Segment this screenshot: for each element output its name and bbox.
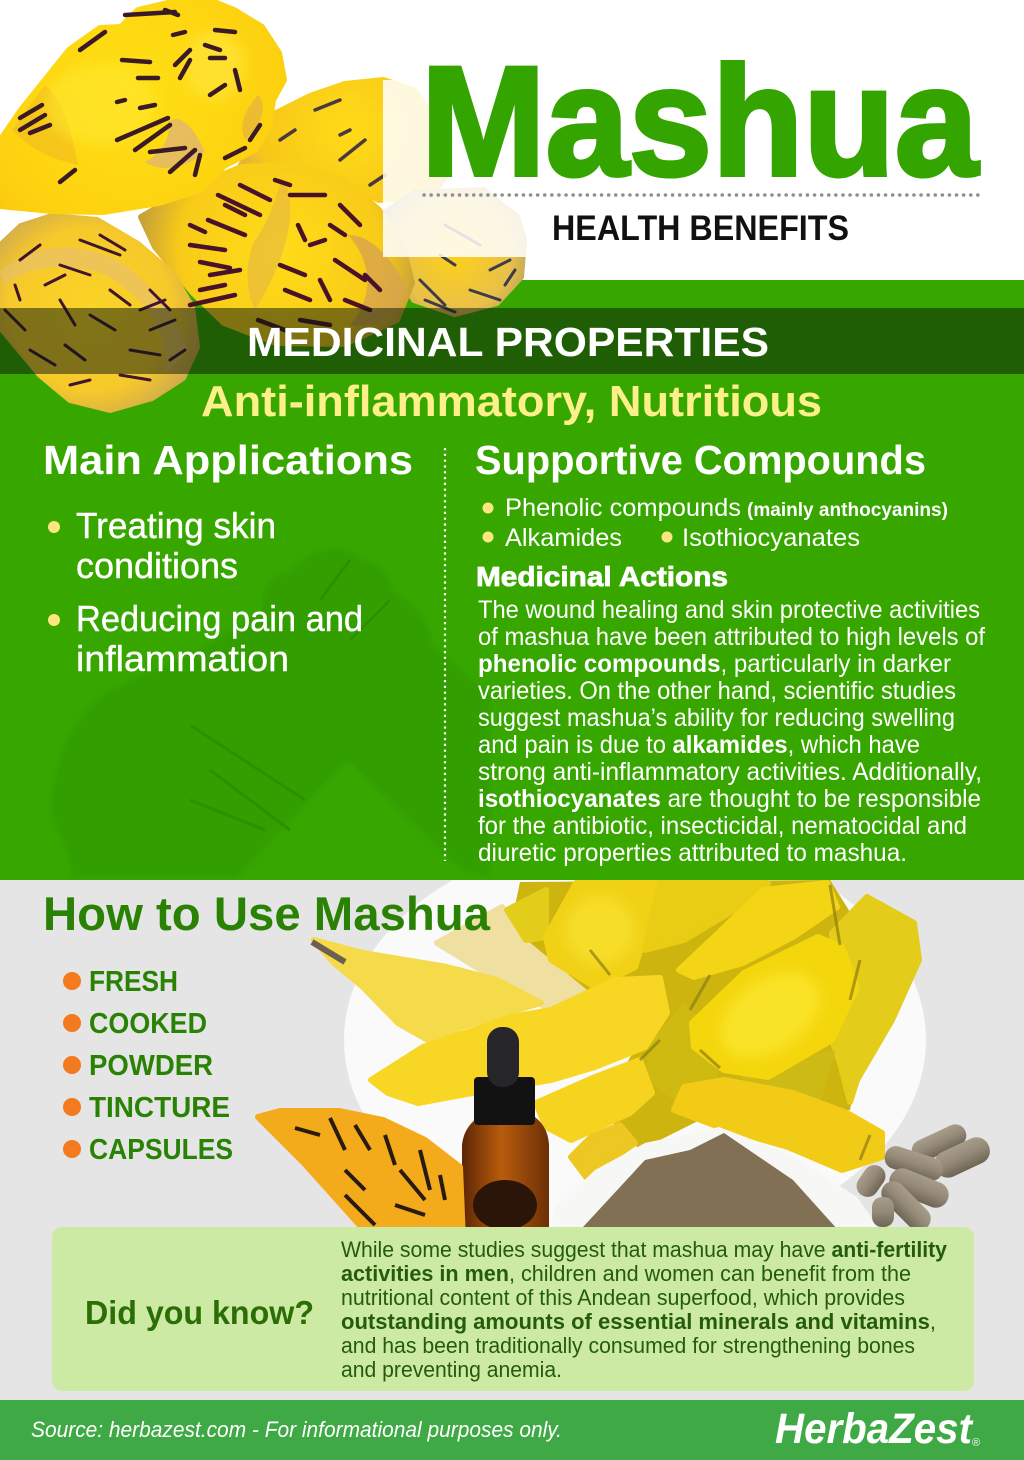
compounds list: Phenolic compounds (505, 494, 741, 522)
powder (583, 1133, 836, 1227)
subtitle: HEALTH BENEFITS (552, 209, 849, 248)
title: Mashua (421, 35, 979, 209)
footer (0, 1400, 1024, 1460)
tuber: right big (692, 937, 857, 1077)
tuber: back right (241, 80, 448, 200)
tuber: top center (546, 883, 660, 987)
tuber: pale back (437, 907, 586, 1007)
compounds list: Isothiocyanates (682, 524, 860, 552)
tuber: bottom right (674, 1080, 882, 1170)
item: cooked: COOKED (89, 1008, 207, 1040)
text: medicinal actions paragraph: strong anti-inflammatory activities. Additionally, (478, 758, 982, 786)
liquid shadow (473, 1180, 537, 1230)
tuber folds (145, 119, 205, 168)
tuber: center (371, 978, 667, 1103)
callout text: and has been traditionally consumed for strengthening bones (341, 1333, 915, 1358)
bullet: reducing pain: Reducing pain and (76, 598, 363, 639)
text: medicinal actions paragraph: suggest mashua’s ability for reducing swelling (478, 704, 955, 732)
white translucent title backing (383, 80, 1024, 257)
image: hands on knee silhouette (50, 549, 490, 878)
image: mashua tubers header (0, 0, 524, 410)
panel: medicinal properties green background (0, 280, 1024, 880)
callout text: activities in men, children and women can benefit from the (341, 1261, 911, 1286)
panel: how to use background (0, 880, 1024, 1400)
subheading: properties: Anti-inflammatory, Nutritious (201, 377, 822, 426)
text: medicinal actions paragraph: varieties. On the other hand, scientific studies (478, 677, 956, 705)
tuber: left (314, 940, 541, 1043)
item: tincture: TINCTURE (89, 1092, 230, 1124)
heading: main applications: Main Applications (43, 437, 413, 483)
bullet: treating skin: conditions (76, 545, 238, 586)
bottle body (462, 1117, 549, 1227)
callout text (341, 1237, 948, 1382)
tuber: small bottom (571, 1125, 635, 1177)
text: medicinal actions paragraph: The wound healing and skin protective activities (478, 596, 980, 624)
tincture bottle (462, 1027, 549, 1240)
callout text: outstanding amounts of essential minerals and vitamins, (341, 1309, 936, 1334)
compounds list: (mainly anthocyanins) (747, 500, 948, 521)
capsules (856, 1124, 990, 1227)
tuber: olive center (650, 1007, 719, 1100)
bullet: treating skin: Treating skin (76, 505, 276, 546)
source note: Source: herbazest.com - For informational purposes only. (31, 1417, 562, 1442)
tuber: top second (645, 883, 768, 950)
text: medicinal actions paragraph (478, 596, 985, 867)
bullet: treating skin (48, 505, 276, 586)
callout heading: Did you know? (85, 1294, 314, 1331)
hand detail shading (190, 560, 390, 830)
text: medicinal actions paragraph: for the antibiotic, insecticidal, nematocidal and (478, 812, 967, 840)
tuber speckle marks (20, 10, 260, 182)
tuber highlights and shading (565, 885, 870, 1160)
text: medicinal actions paragraph: diuretic properties attributed to mashua. (478, 839, 907, 867)
callout: did you know (52, 1227, 974, 1391)
dark band: medicinal properties (0, 308, 1024, 374)
bowl (584, 1127, 877, 1227)
bullet: reducing pain: inflammation (76, 638, 289, 679)
panel: supportive compounds (475, 437, 985, 867)
tuber: lower left (0, 216, 197, 410)
item: capsules: CAPSULES (89, 1134, 233, 1166)
orange tuber (258, 1111, 463, 1240)
logo: HerbaZest: HerbaZest (775, 1405, 974, 1453)
white title area right (528, 0, 1024, 280)
tuber: lower right olive (832, 1050, 835, 1056)
compounds list (482, 494, 948, 552)
heading: medicinal properties: MEDICINAL PROPERTIES (247, 319, 769, 365)
list: forms of use (63, 966, 233, 1166)
tubers mass (516, 880, 852, 1148)
panel: main applications (43, 437, 413, 679)
tuber: top left small (507, 890, 546, 940)
callout text: nutritional content of this Andean superfood, which provides (341, 1285, 905, 1310)
tuber: small right (383, 190, 524, 314)
column divider (444, 448, 446, 861)
heading: how to use mashua: How to Use Mashua (43, 887, 491, 940)
text: medicinal actions paragraph: phenolic compounds, particularly in darker (478, 650, 951, 678)
item: fresh: FRESH (89, 966, 178, 998)
callout text: and preventing anemia. (341, 1357, 562, 1382)
dropper (487, 1027, 519, 1087)
bullet: reducing pain (48, 598, 363, 679)
text: medicinal actions paragraph: of mashua have been attributed to high levels of (478, 623, 985, 651)
tuber: upper right (679, 883, 837, 977)
tuber: lower center (536, 1060, 652, 1140)
tuber: top large (0, 0, 284, 212)
image: plate of mashua with tincture, powder and capsules (255, 880, 990, 1227)
bottle cap (474, 1077, 535, 1125)
tuber: far right (832, 897, 919, 1102)
title divider dots (424, 193, 978, 197)
plate (344, 880, 926, 1227)
item: powder: POWDER (89, 1050, 213, 1082)
stem: left tuber (312, 942, 345, 962)
text: medicinal actions paragraph: and pain is due to alkamides, which have (478, 731, 920, 759)
tuber: middle (141, 165, 412, 344)
compounds list: Alkamides (505, 524, 622, 552)
heading: medicinal actions: Medicinal Actions (476, 561, 728, 592)
text: medicinal actions paragraph: isothiocyanates are thought to be responsible (478, 785, 981, 813)
registered mark: ® (972, 1437, 980, 1449)
callout text: While some studies suggest that mashua may have anti-fertility (341, 1237, 948, 1262)
heading: supportive compounds: Supportive Compounds (475, 437, 926, 483)
